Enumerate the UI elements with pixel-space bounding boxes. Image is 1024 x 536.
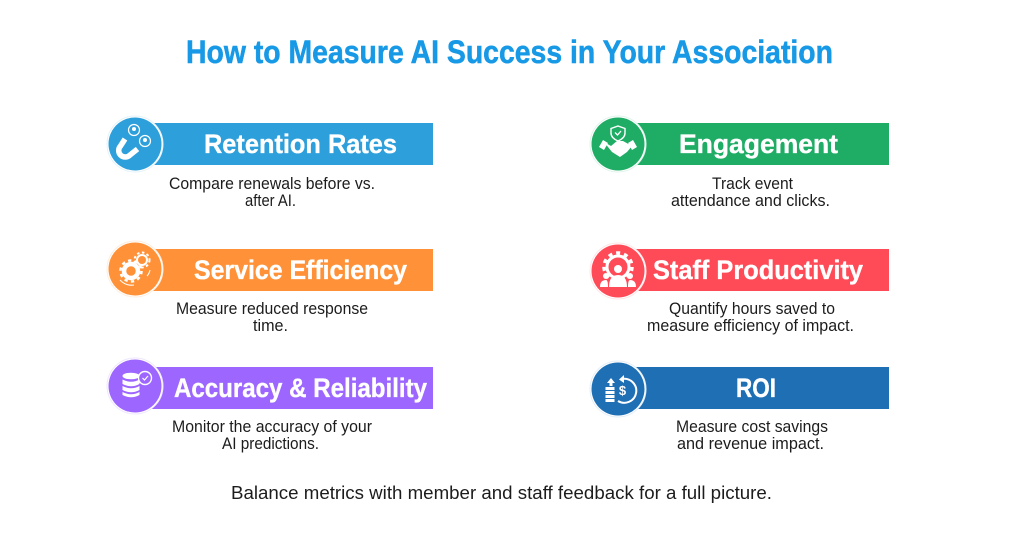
icon: handshake with shield [590,116,646,172]
banner: engagement [635,123,889,165]
panel: roi [590,361,889,453]
text: roi description: and revenue impact. [677,435,824,453]
text: engagement description: Track event [712,175,793,193]
panel: staff productivity [590,243,889,335]
text: engagement description [671,175,830,210]
heading: service efficiency: Service Efficiency [194,255,407,285]
text: service efficiency description: Measure reduced response [176,300,368,318]
banner: staff productivity [635,249,889,291]
icon: database with badge [107,358,163,414]
footer note: Balance metrics with member and staff feedback for a full picture. [231,482,772,503]
icon: team with gear [590,243,646,299]
icon: coins and dollar return [590,361,646,417]
heading: retention rates: Retention Rates [204,129,397,159]
text: retention rates description: after AI. [245,192,296,210]
text: staff productivity description [647,300,854,335]
title: How to Measure AI Success in Your Association [186,34,833,70]
text: staff productivity description: Quantify hours saved to [669,300,835,318]
icon: magnet with members [107,116,163,172]
dollar sign: $ [619,383,627,398]
banner: service efficiency [150,249,433,291]
text: retention rates description [169,175,375,210]
text: accuracy and reliability description [172,418,372,453]
text: staff productivity description: measure efficiency of impact. [647,317,854,335]
heading: accuracy and reliability: Accuracy & Reliability [174,373,427,403]
heading: staff productivity: Staff Productivity [653,255,863,285]
panel: engagement [590,116,889,210]
text: roi description: Measure cost savings [676,418,828,436]
banner: accuracy and reliability [150,367,433,409]
text: service efficiency description: time. [253,317,288,335]
text: retention rates description: Compare renewals before vs. [169,175,375,193]
text: roi description [676,418,828,453]
icon: gears [107,241,163,297]
text: accuracy and reliability description: AI predictions. [222,435,319,453]
panel: service efficiency [107,241,433,335]
banner: roi [635,367,889,409]
banner: retention rates [150,123,433,165]
heading: roi: ROI [736,373,776,403]
heading: engagement: Engagement [679,129,838,159]
panel: retention rates [107,116,433,210]
text: service efficiency description [176,300,368,335]
text: accuracy and reliability description: Monitor the accuracy of your [172,418,372,436]
panel: accuracy and reliability [107,358,433,453]
text: engagement description: attendance and clicks. [671,192,830,210]
